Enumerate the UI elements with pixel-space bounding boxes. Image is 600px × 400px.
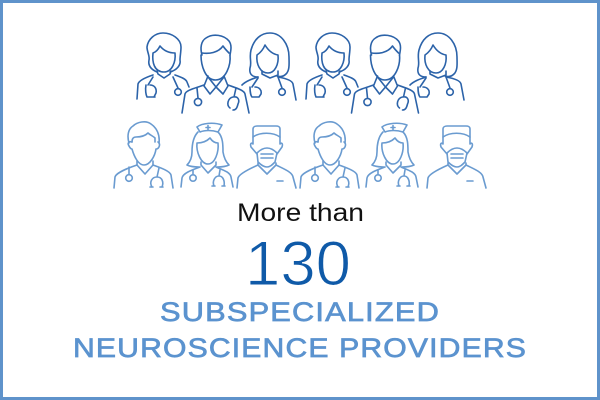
description line 2: NEUROSCIENCE PROVIDERS <box>73 333 527 363</box>
top row of doctor icons <box>137 33 464 113</box>
key number: 130 <box>245 229 351 299</box>
lead-in text: More than <box>237 199 364 227</box>
description line 1: SUBSPECIALIZED <box>160 297 440 327</box>
bottom row of provider icons <box>114 122 486 188</box>
